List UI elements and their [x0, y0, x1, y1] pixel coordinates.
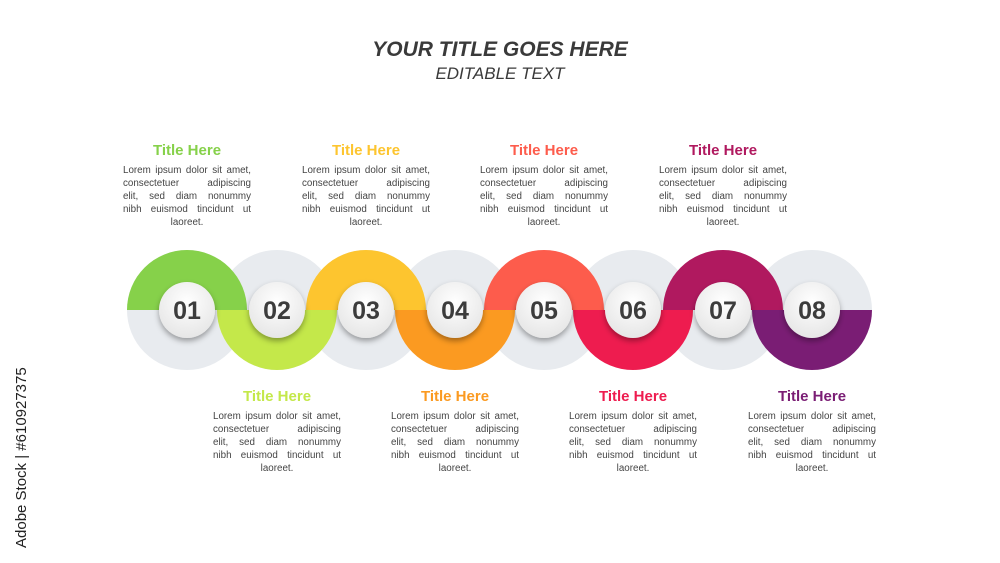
text block 5: elit, sed diam nonummy	[480, 191, 608, 202]
text block 6: Title Here	[599, 388, 667, 405]
text block 7: consectetuer adipiscing	[659, 178, 787, 189]
timeline circles: 02	[263, 297, 291, 325]
text block 3	[302, 142, 430, 228]
timeline circles: 08	[798, 297, 826, 325]
text block 1: Lorem ipsum dolor sit amet,	[123, 165, 251, 176]
text block 4: laoreet.	[439, 463, 471, 474]
text block 7: laoreet.	[707, 217, 739, 228]
text block 3: laoreet.	[350, 217, 382, 228]
text block 3: consectetuer adipiscing	[302, 178, 430, 189]
timeline circles: 06	[619, 297, 647, 325]
text block 2: elit, sed diam nonummy	[213, 437, 341, 448]
text block 5	[480, 142, 608, 228]
timeline circles: 04	[441, 297, 469, 325]
text block 4: Lorem ipsum dolor sit amet,	[391, 411, 519, 422]
text block 6: nibh euismod tincidunt ut	[569, 450, 697, 461]
text block 8: elit, sed diam nonummy	[748, 437, 876, 448]
side watermark text: Adobe Stock | #610927375	[13, 367, 30, 548]
timeline circles: 05	[530, 297, 558, 325]
text block 5: consectetuer adipiscing	[480, 178, 608, 189]
text block 2: Lorem ipsum dolor sit amet,	[213, 411, 341, 422]
text block 1	[123, 142, 251, 228]
text block 2: Title Here	[243, 388, 311, 405]
text block 2: laoreet.	[261, 463, 293, 474]
text block 1: consectetuer adipiscing	[123, 178, 251, 189]
text block 8	[748, 388, 876, 474]
text block 2: nibh euismod tincidunt ut	[213, 450, 341, 461]
text block 2	[213, 388, 341, 474]
title: YOUR TITLE GOES HERE	[372, 38, 628, 61]
text block 6	[569, 388, 697, 474]
text block 6: laoreet.	[617, 463, 649, 474]
text block 2: consectetuer adipiscing	[213, 424, 341, 435]
text block 3: nibh euismod tincidunt ut	[302, 204, 430, 215]
text block 1: Title Here	[153, 142, 221, 159]
text block 7: Lorem ipsum dolor sit amet,	[659, 165, 787, 176]
text block 5: Lorem ipsum dolor sit amet,	[480, 165, 608, 176]
text block 4: nibh euismod tincidunt ut	[391, 450, 519, 461]
text block 4: Title Here	[421, 388, 489, 405]
text block 6: consectetuer adipiscing	[569, 424, 697, 435]
subtitle: EDITABLE TEXT	[435, 64, 565, 83]
text block 6: elit, sed diam nonummy	[569, 437, 697, 448]
text block 8: Lorem ipsum dolor sit amet,	[748, 411, 876, 422]
text block 8: nibh euismod tincidunt ut	[748, 450, 876, 461]
text block 4: elit, sed diam nonummy	[391, 437, 519, 448]
text block 5: laoreet.	[528, 217, 560, 228]
text block 3: Title Here	[332, 142, 400, 159]
text block 4	[391, 388, 519, 474]
text block 3: Lorem ipsum dolor sit amet,	[302, 165, 430, 176]
text block 3: elit, sed diam nonummy	[302, 191, 430, 202]
text block 7	[659, 142, 787, 228]
text block 1: nibh euismod tincidunt ut	[123, 204, 251, 215]
text block 8: Title Here	[778, 388, 846, 405]
text block 7: nibh euismod tincidunt ut	[659, 204, 787, 215]
timeline circles: 01	[173, 297, 201, 325]
text block 8: laoreet.	[796, 463, 828, 474]
text block 5: nibh euismod tincidunt ut	[480, 204, 608, 215]
text block 7: elit, sed diam nonummy	[659, 191, 787, 202]
text block 1: laoreet.	[171, 217, 203, 228]
timeline circles: 03	[352, 297, 380, 325]
timeline circles: 07	[709, 297, 737, 325]
text block 6: Lorem ipsum dolor sit amet,	[569, 411, 697, 422]
text block 7: Title Here	[689, 142, 757, 159]
text block 1: elit, sed diam nonummy	[123, 191, 251, 202]
text block 4: consectetuer adipiscing	[391, 424, 519, 435]
text block 8: consectetuer adipiscing	[748, 424, 876, 435]
text block 5: Title Here	[510, 142, 578, 159]
